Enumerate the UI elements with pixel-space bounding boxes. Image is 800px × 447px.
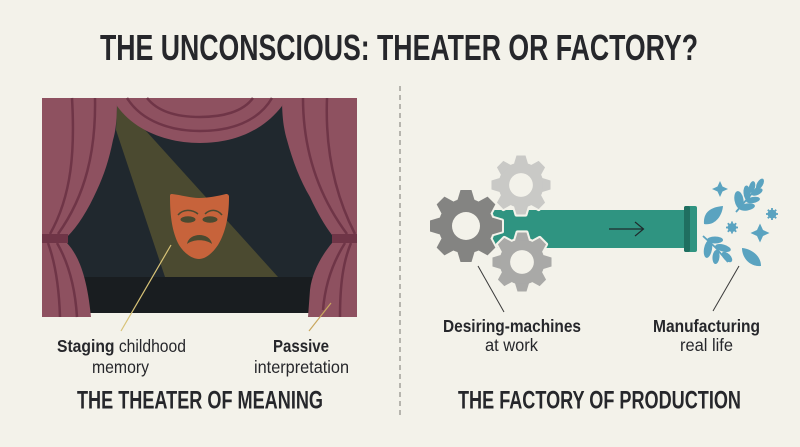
pointer line: passive [309, 303, 331, 331]
label: manufacturing real life: real life [680, 335, 733, 355]
label: desiring-machines at work: at work [485, 335, 538, 355]
pointer line: manufacturing [713, 266, 739, 311]
valance curtain [115, 98, 284, 143]
label: passive interpretation [254, 336, 349, 377]
pipe [490, 206, 697, 252]
spotlight beam [116, 105, 278, 277]
label: staging childhood memory: memory [92, 357, 149, 377]
label: passive interpretation: Passive [273, 336, 329, 356]
label: manufacturing real life: Manufacturing [653, 316, 760, 336]
icon: tragedy mask [170, 194, 229, 259]
icons: leaves and sparkles [702, 177, 778, 266]
heading: the theater of meaning: THE THEATER OF MEANING [77, 386, 323, 414]
label: passive interpretation: interpretation [254, 357, 349, 377]
pointer line: desiring-machines [478, 266, 504, 312]
label: staging childhood memory [57, 336, 186, 377]
panel: factory illustration [430, 155, 778, 312]
left curtain [42, 98, 117, 317]
stage backdrop [42, 98, 357, 277]
label: manufacturing real life [653, 316, 760, 355]
label: staging childhood memory: Staging childhood [57, 336, 186, 356]
icon: dark gear [430, 190, 502, 262]
stage floor [42, 277, 357, 313]
label: desiring-machines at work [443, 316, 581, 355]
pointer line: staging [121, 245, 171, 331]
panel: theater stage illustration [42, 98, 357, 317]
icon: medium gear [492, 232, 552, 292]
icon: light gear [491, 155, 551, 215]
arrow [609, 222, 644, 236]
label: desiring-machines at work: Desiring-machines [443, 316, 581, 336]
right curtain [282, 98, 357, 317]
